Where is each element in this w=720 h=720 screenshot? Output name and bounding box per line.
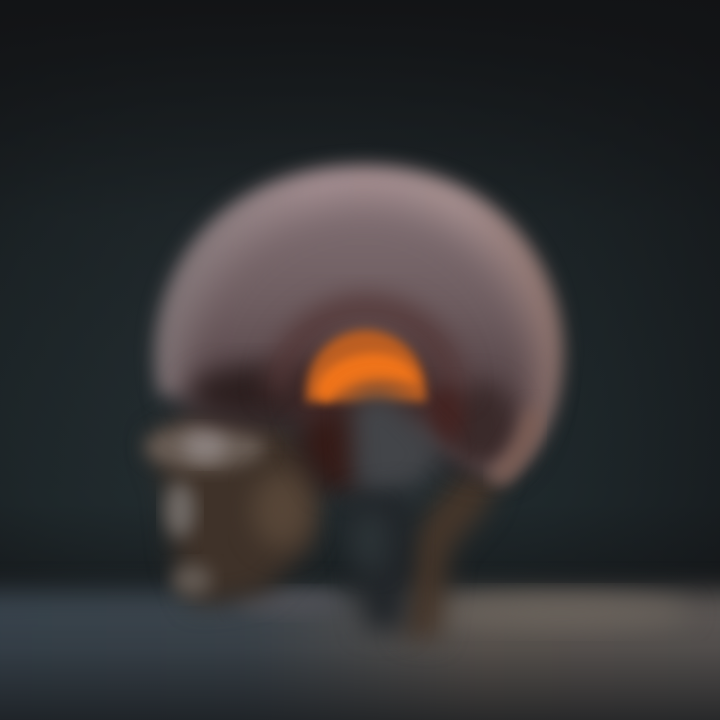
brain lower warm edge <box>495 410 535 480</box>
icon: brain stem, tan <box>402 460 505 640</box>
skull chin <box>172 564 212 596</box>
icon: right red tissue <box>425 385 465 445</box>
floor surface <box>0 590 720 720</box>
skull jaw column <box>165 482 195 538</box>
dark surround of the core <box>293 339 437 451</box>
brain outer rim <box>155 165 563 480</box>
dark inner ring <box>280 309 452 395</box>
brain inner mass <box>182 200 538 470</box>
icon: glowing orange core <box>306 330 426 402</box>
floor light patches <box>235 591 345 615</box>
icon: dark grey stem <box>345 392 445 630</box>
brain lower shadow right <box>444 383 516 467</box>
icon: red inner tissue <box>295 409 375 490</box>
panel: brain hemisphere <box>155 165 563 480</box>
brain lower shadow left <box>189 365 341 421</box>
icon: skull and lower structure <box>145 410 320 605</box>
skull highlight <box>145 425 265 469</box>
skull cheek <box>252 472 312 548</box>
